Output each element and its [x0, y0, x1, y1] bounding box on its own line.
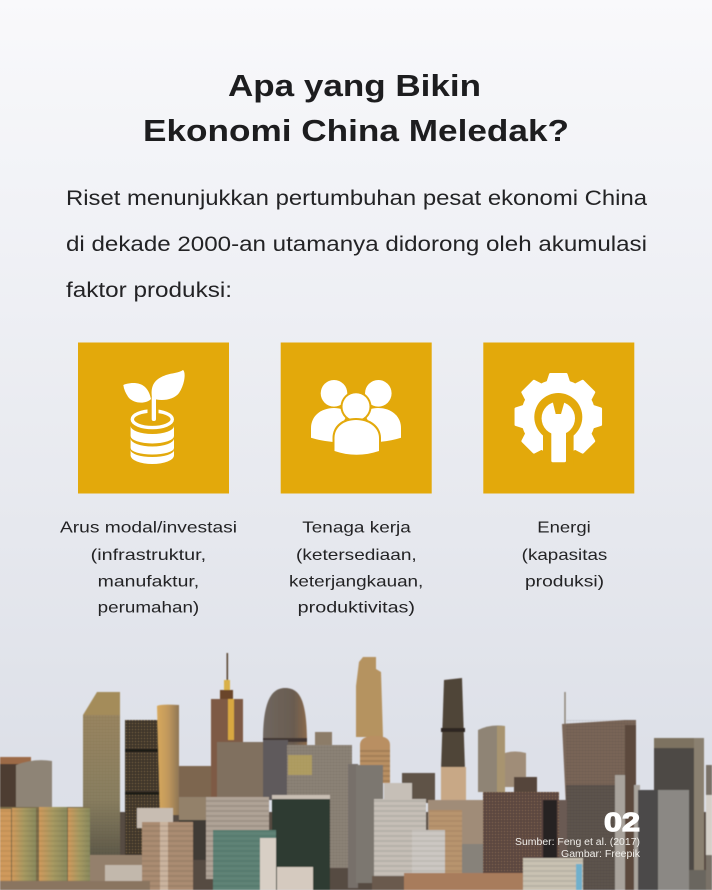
label: capital	[60, 520, 237, 616]
icon tile: labour	[281, 342, 432, 494]
label: energy: Energi	[537, 520, 591, 537]
label: capital: Arus modal/investasi	[60, 520, 237, 537]
left buildings	[0, 757, 31, 812]
icon: gear and wrench	[516, 374, 601, 465]
right buildings	[356, 657, 383, 737]
label: energy	[522, 520, 607, 591]
label: labour: keterjangkauan,	[289, 574, 423, 591]
intro paragraph: faktor produksi:	[66, 279, 232, 302]
spire tower	[226, 653, 228, 683]
panel: capital	[60, 342, 237, 616]
label: capital: perumahan)	[98, 600, 199, 616]
label: labour: produktivitas)	[298, 600, 415, 616]
label: energy: produksi)	[525, 574, 604, 591]
label: capital: (infrastruktur,	[91, 547, 206, 564]
label: labour	[289, 520, 423, 616]
page number: 02	[604, 807, 640, 837]
source credits: Sumber: Feng et al. (2017)	[515, 837, 640, 848]
label: labour: Tenaga kerja	[302, 520, 411, 537]
panel: energy	[483, 342, 634, 591]
intro paragraph	[66, 187, 647, 302]
label: labour: (ketersediaan,	[296, 547, 417, 564]
central lower blocks	[206, 797, 269, 879]
intro paragraph: Riset menunjukkan pertumbuhan pesat ekonomi China	[66, 187, 647, 210]
title: Apa yang Bikin	[228, 68, 481, 103]
icon tile: capital	[78, 342, 229, 494]
source credits: Gambar: Freepik	[561, 849, 641, 860]
icon: group of people	[311, 380, 401, 455]
city skyline	[0, 653, 712, 890]
title: Ekonomi China Meledak?	[143, 113, 569, 148]
source credits	[515, 837, 641, 860]
intro paragraph: di dekade 2000-an utamanya didorong oleh akumulasi	[66, 233, 647, 256]
panel: labour	[281, 342, 432, 616]
icon: plant on coins	[123, 370, 185, 464]
skyline base fill	[0, 812, 712, 890]
label: energy: (kapasitas	[522, 547, 607, 564]
title	[143, 68, 569, 148]
icon tile: energy	[483, 342, 634, 494]
dome tower	[263, 688, 307, 745]
label: capital: manufaktur,	[98, 574, 199, 591]
